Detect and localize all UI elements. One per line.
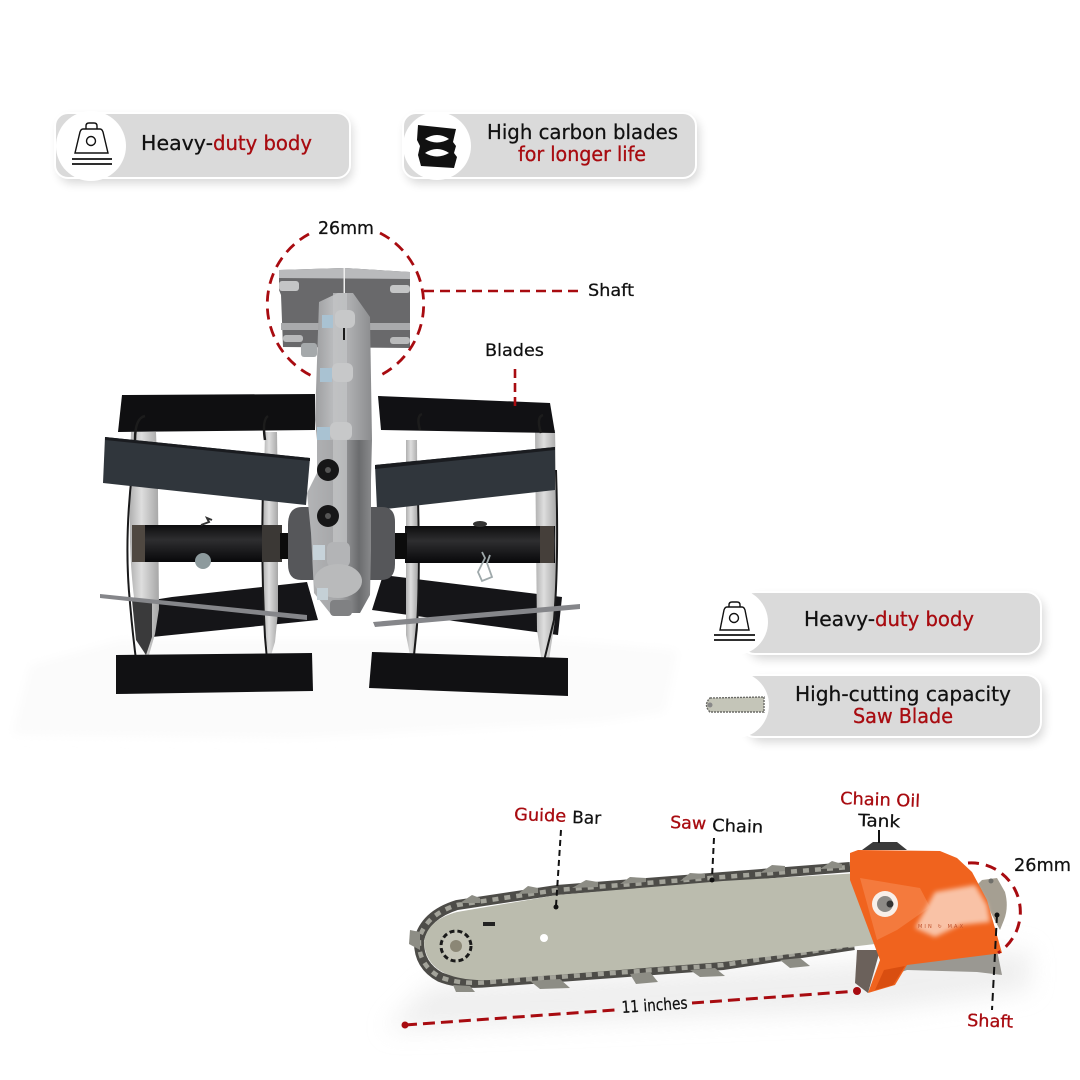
label bbox=[487, 120, 678, 166]
orange cover bbox=[850, 850, 1002, 993]
label: blades: Blades bbox=[485, 341, 544, 361]
dimension line: 11 inches bbox=[402, 987, 861, 1028]
label: duty body bbox=[213, 131, 312, 155]
cover bolt bbox=[872, 891, 898, 917]
callout: tank line bbox=[878, 830, 880, 843]
coupling bbox=[978, 878, 1007, 930]
base plate bbox=[880, 950, 1002, 980]
callout: chainsaw 26mm ring bbox=[968, 863, 1020, 953]
chain bbox=[419, 867, 854, 983]
chainsaw shadow bbox=[385, 950, 1030, 1030]
callout: blades line bbox=[514, 369, 516, 409]
label: saw chain: Saw bbox=[670, 813, 707, 834]
label: chain oil tank: Chain Oil bbox=[840, 789, 920, 812]
badge: heavy-duty body (right) bbox=[702, 589, 1044, 659]
lower wedges bbox=[152, 582, 318, 637]
badge: high carbon blades bbox=[403, 112, 699, 183]
label: chainsaw 26mm: 26mm bbox=[1014, 856, 1071, 876]
label: duty body bbox=[875, 607, 974, 631]
label: chain oil tank bbox=[840, 789, 920, 832]
discs bbox=[127, 430, 557, 670]
label: 11 inches: 11 inches bbox=[621, 993, 688, 1017]
label: shaft: Shaft bbox=[967, 1011, 1014, 1033]
oil cap bbox=[862, 842, 907, 850]
tiller attachment bbox=[100, 293, 580, 696]
label: shaft: Shaft bbox=[588, 281, 634, 301]
label: Heavy- bbox=[141, 131, 213, 155]
label bbox=[795, 682, 1011, 728]
label: for longer life bbox=[518, 142, 646, 166]
icon: weight bbox=[714, 602, 755, 640]
bar hole bbox=[540, 934, 548, 942]
cutters bbox=[409, 861, 842, 992]
label: High carbon blades bbox=[487, 120, 678, 144]
blade mounts bbox=[135, 414, 543, 440]
bar marking bbox=[483, 922, 495, 926]
badge: high-cutting capacity bbox=[703, 672, 1044, 742]
cover highlights bbox=[915, 885, 990, 937]
label: Saw Blade bbox=[853, 704, 953, 728]
badge: heavy-duty body (top left) bbox=[55, 111, 352, 183]
pins bbox=[195, 518, 492, 581]
label: Heavy- bbox=[804, 607, 875, 631]
icon: weight bbox=[72, 123, 112, 164]
label: guide bar bbox=[514, 805, 602, 829]
label: guide bar: Bar bbox=[572, 808, 602, 829]
callout: 26mm shaft ring bbox=[267, 233, 424, 377]
cover panel bbox=[860, 878, 930, 940]
cover grip bbox=[875, 966, 905, 990]
icon: saw bar bbox=[706, 697, 764, 712]
icon: blades bbox=[417, 125, 457, 168]
label bbox=[141, 131, 312, 155]
column and gearbox bbox=[288, 293, 395, 616]
label: saw chain bbox=[670, 813, 763, 838]
cover marking: MIN ↻ MAX bbox=[918, 924, 964, 930]
tiller image faint backdrop bbox=[12, 640, 678, 738]
guide bar bbox=[424, 873, 875, 980]
chainsaw attachment bbox=[409, 842, 1007, 993]
label: guide bar: Guide bbox=[514, 805, 566, 827]
callout: guide bar line bbox=[554, 830, 561, 910]
tubes bbox=[132, 525, 555, 563]
callout: shaft line bbox=[424, 290, 578, 292]
label: saw chain: Chain bbox=[712, 816, 763, 838]
mounting plate bbox=[279, 268, 410, 348]
mid blades bbox=[103, 437, 310, 505]
label: 26mm: 26mm bbox=[318, 219, 374, 239]
bottom blades bbox=[116, 653, 313, 694]
sprocket bbox=[441, 931, 471, 961]
label bbox=[804, 607, 974, 631]
label: High-cutting capacity bbox=[795, 682, 1011, 706]
thin front blades bbox=[100, 594, 307, 620]
callout: saw chain line bbox=[710, 838, 714, 882]
callout: shaft line bbox=[992, 912, 1000, 1010]
label: chain oil tank: Tank bbox=[857, 811, 901, 832]
top blades bbox=[118, 394, 315, 432]
